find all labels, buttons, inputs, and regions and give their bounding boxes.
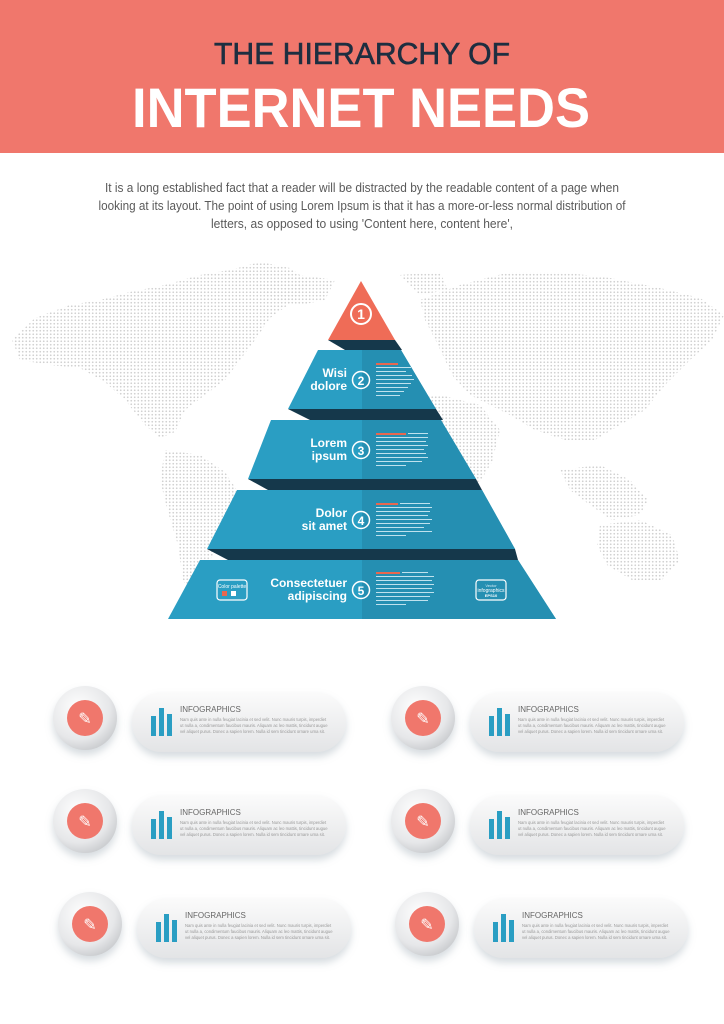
card 3: vel aliquet purus. Donec a sapien lorem. Nulla id sem tincidunt ornare urna sit. <box>180 832 325 837</box>
card 4: Nam quis ante in nulla feugiat lacinia et sed velit. Nunc mauris turpis, imperdiet <box>518 820 665 825</box>
tier 3 <box>248 420 476 479</box>
tier 4: 4 <box>358 514 365 528</box>
intro paragraph: looking at its layout. The point of using Lorem Ipsum is that it has a more-or-less normal distribution of <box>98 199 626 213</box>
card 1: INFOGRAPHICS <box>180 705 241 714</box>
card 1: ✎ <box>78 711 92 728</box>
shadows <box>328 340 402 350</box>
tier 5: Consectetuer <box>270 576 347 590</box>
card 2 <box>391 686 684 752</box>
card 5: INFOGRAPHICS <box>185 911 246 920</box>
card 6: vel aliquet purus. Donec a sapien lorem. Nulla id sem tincidunt ornare urna sit. <box>522 935 667 940</box>
card 2: ✎ <box>416 711 430 728</box>
tier 4: Dolor <box>316 506 347 520</box>
tier 3: Lorem <box>310 436 347 450</box>
card 6: Nam quis ante in nulla feugiat lacinia et sed velit. Nunc mauris turpis, imperdiet <box>522 923 669 928</box>
tier 4: sit amet <box>302 519 347 533</box>
tier 5: 5 <box>358 584 365 598</box>
vector badge: Vector <box>485 583 497 588</box>
card 5 <box>58 892 351 958</box>
vector badge <box>476 580 506 600</box>
vector badge: EPS10 <box>485 593 498 598</box>
color palette badge <box>217 580 247 600</box>
intro paragraph: letters, as opposed to using 'Content here, content here', <box>211 217 513 231</box>
card 4: ✎ <box>416 814 430 831</box>
card 2: Nam quis ante in nulla feugiat lacinia et sed velit. Nunc mauris turpis, imperdiet <box>518 717 665 722</box>
card 2: INFOGRAPHICS <box>518 705 579 714</box>
tier 5 <box>168 560 556 619</box>
world map dotted <box>12 262 724 598</box>
tier 5: adipiscing <box>288 589 347 603</box>
card 4: INFOGRAPHICS <box>518 808 579 817</box>
title line 2: INTERNET NEEDS <box>132 76 590 139</box>
card 5: Nam quis ante in nulla feugiat lacinia et sed velit. Nunc mauris turpis, imperdiet <box>185 923 332 928</box>
card 1 <box>53 686 346 752</box>
card 1: Nam quis ante in nulla feugiat lacinia et sed velit. Nunc mauris turpis, imperdiet <box>180 717 327 722</box>
card 3: ✎ <box>78 814 92 831</box>
tier 2: 2 <box>358 374 365 388</box>
color palette badge: Color palette <box>218 584 246 590</box>
card 3: Nam quis ante in nulla feugiat lacinia et sed velit. Nunc mauris turpis, imperdiet <box>180 820 327 825</box>
card 5: vel aliquet purus. Donec a sapien lorem. Nulla id sem tincidunt ornare urna sit. <box>185 935 330 940</box>
tier 3: ipsum <box>312 449 347 463</box>
card 3: INFOGRAPHICS <box>180 808 241 817</box>
tier 4 <box>207 490 515 549</box>
intro paragraph <box>98 181 626 231</box>
card 6: ut nulla a, condimentum faucibus mauris. Aliquam ac leo mattis, tincidunt augue <box>522 929 670 934</box>
vector badge: infographics <box>478 588 505 594</box>
tier 2: dolore <box>310 379 347 393</box>
card 5: ✎ <box>83 917 97 934</box>
card 4 <box>391 789 684 855</box>
card 1: vel aliquet purus. Donec a sapien lorem. Nulla id sem tincidunt ornare urna sit. <box>180 729 325 734</box>
title line 1: THE HIERARCHY OF <box>214 36 510 71</box>
pyramid <box>168 281 556 619</box>
tier 1: 1 <box>357 306 365 322</box>
card 2: vel aliquet purus. Donec a sapien lorem. Nulla id sem tincidunt ornare urna sit. <box>518 729 663 734</box>
intro paragraph: It is a long established fact that a reader will be distracted by the readable content of a page when <box>105 181 619 195</box>
card 5: ut nulla a, condimentum faucibus mauris. Aliquam ac leo mattis, tincidunt augue <box>185 929 333 934</box>
tier 2 <box>288 350 436 409</box>
tier 3: 3 <box>358 444 365 458</box>
card 3: ut nulla a, condimentum faucibus mauris. Aliquam ac leo mattis, tincidunt augue <box>180 826 328 831</box>
tier 2: Wisi <box>322 366 347 380</box>
card 6: INFOGRAPHICS <box>522 911 583 920</box>
card 6 <box>395 892 688 958</box>
card 6: ✎ <box>420 917 434 934</box>
header band <box>0 0 724 153</box>
tier 1 <box>328 281 395 340</box>
card 1: ut nulla a, condimentum faucibus mauris. Aliquam ac leo mattis, tincidunt augue <box>180 723 328 728</box>
card 2: ut nulla a, condimentum faucibus mauris. Aliquam ac leo mattis, tincidunt augue <box>518 723 666 728</box>
card 4: ut nulla a, condimentum faucibus mauris. Aliquam ac leo mattis, tincidunt augue <box>518 826 666 831</box>
card 4: vel aliquet purus. Donec a sapien lorem. Nulla id sem tincidunt ornare urna sit. <box>518 832 663 837</box>
card 3 <box>53 789 346 855</box>
